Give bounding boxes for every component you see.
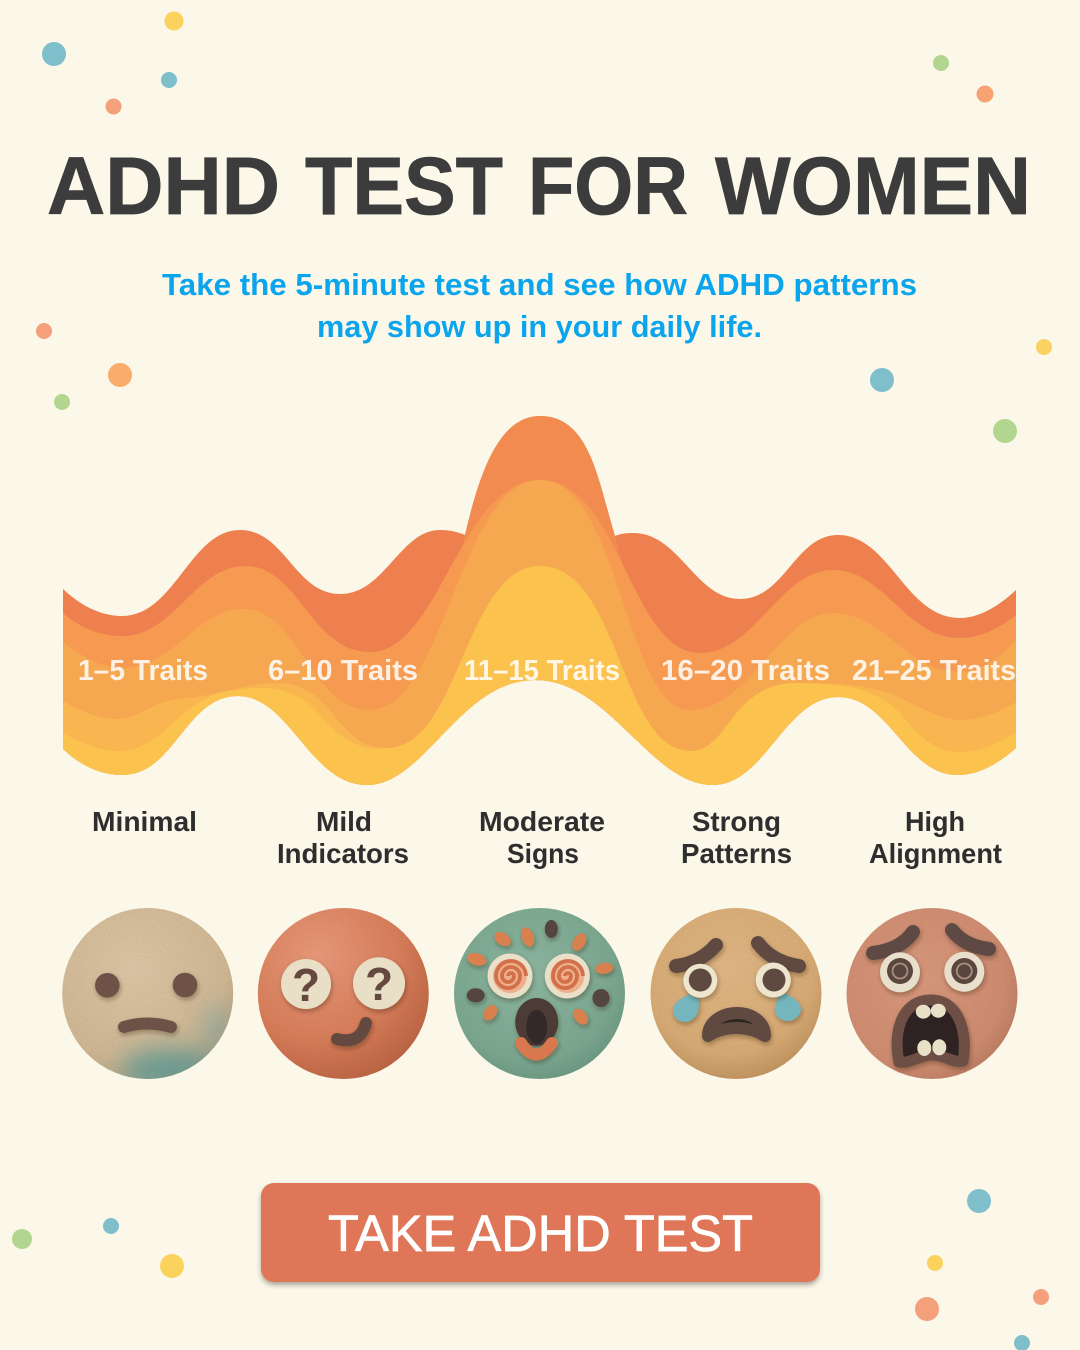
level labels: Alignment bbox=[869, 838, 1002, 869]
icon: high alignment face bbox=[846, 908, 1018, 1079]
stream layer: dark orange bbox=[60, 410, 1020, 790]
trait range labels bbox=[78, 655, 1016, 687]
level labels: High bbox=[905, 806, 965, 837]
title: WOMEN bbox=[715, 141, 1031, 232]
streamgraph chart bbox=[60, 410, 1020, 800]
trait range labels: 11–15 Traits bbox=[464, 655, 620, 687]
subtitle: may show up in your daily life. bbox=[317, 309, 762, 344]
trait range labels: 21–25 Traits bbox=[852, 655, 1016, 687]
stream layer: light orange bbox=[63, 480, 1016, 800]
stream layer: mid yellow bbox=[63, 680, 1016, 785]
level labels: Signs bbox=[507, 838, 579, 869]
title: FOR bbox=[528, 141, 688, 232]
level labels: Strong bbox=[692, 806, 781, 837]
icon: minimal face bbox=[62, 908, 236, 1092]
title bbox=[47, 141, 1031, 232]
title: TEST bbox=[305, 141, 503, 232]
subtitle bbox=[162, 267, 917, 344]
stream layer: bright yellow bbox=[63, 566, 1016, 800]
subtitle: Take the 5-minute test and see how ADHD patterns bbox=[162, 267, 917, 302]
level labels: Mild bbox=[316, 806, 372, 837]
icon: moderate face bbox=[454, 908, 625, 1079]
stream layer: central peak bbox=[414, 416, 680, 776]
call to action button: TAKE ADHD TEST bbox=[328, 1205, 753, 1262]
title: ADHD bbox=[47, 141, 280, 232]
level labels: Indicators bbox=[277, 838, 409, 869]
stream layer: orange bbox=[63, 480, 1016, 800]
level labels: Moderate bbox=[479, 806, 605, 837]
trait range labels: 16–20 Traits bbox=[661, 655, 830, 687]
call to action button bbox=[261, 1183, 820, 1282]
icon: mild face bbox=[258, 908, 429, 1079]
trait range labels: 1–5 Traits bbox=[78, 655, 208, 687]
icon: mild face: ? bbox=[292, 959, 320, 1011]
level labels: Minimal bbox=[92, 806, 197, 837]
icon: mild face: ? bbox=[365, 958, 393, 1010]
icon: strong face bbox=[650, 908, 822, 1079]
level labels: Patterns bbox=[681, 838, 792, 869]
trait range labels: 6–10 Traits bbox=[268, 655, 418, 687]
level labels bbox=[92, 806, 1002, 869]
